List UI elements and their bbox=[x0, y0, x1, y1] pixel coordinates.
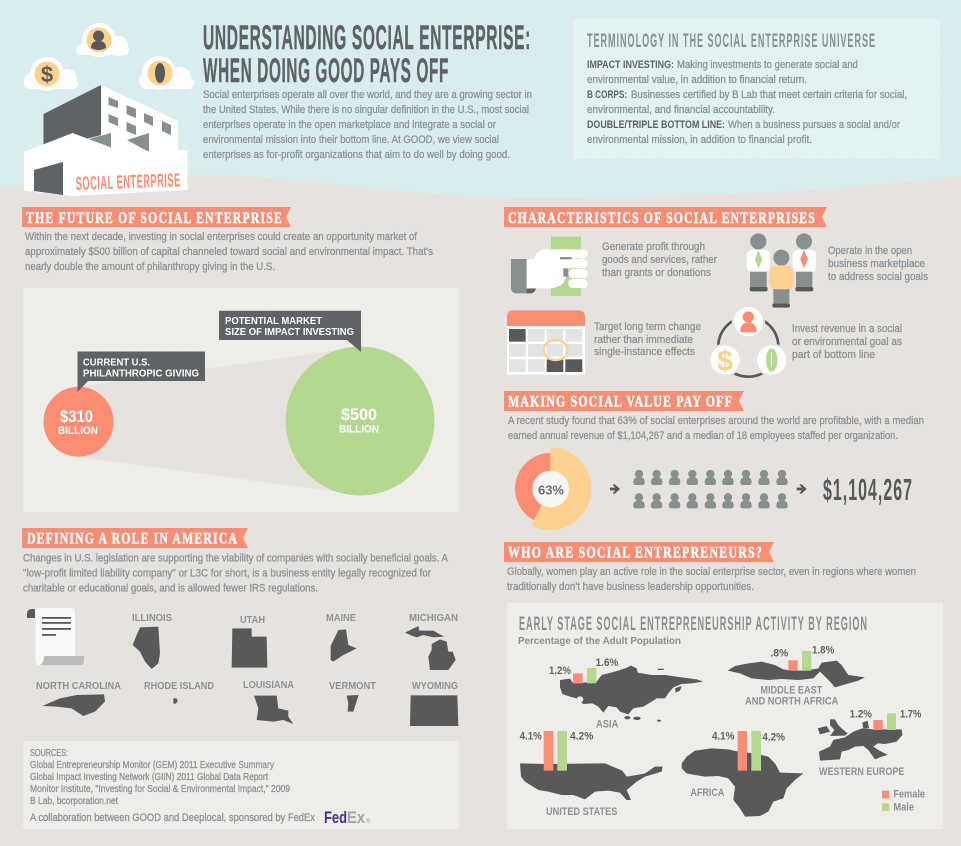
chart: 63% donut bbox=[515, 447, 591, 530]
characteristic: long term change: single-instance effects bbox=[594, 346, 695, 358]
state labels: ILLINOIS bbox=[132, 612, 172, 624]
circle: $500 billion: $500 bbox=[341, 405, 377, 424]
future text: nearly double the amount of philanthropy giving in the U.S. bbox=[25, 261, 275, 273]
region: Western Europe bbox=[818, 709, 922, 778]
region: United States: 4.2% bbox=[570, 730, 594, 742]
heading: making social value pay off bbox=[504, 391, 744, 411]
legend: Female bbox=[893, 788, 925, 800]
sources list: B Lab, bcorporation.net bbox=[30, 796, 118, 807]
icon: legal scroll bbox=[27, 608, 84, 665]
panel: terminology bbox=[573, 19, 940, 159]
characteristic: long term change bbox=[594, 321, 701, 358]
value text: earned annual revenue of $1,104,267 and a median of 18 employees staffed per organization. bbox=[508, 430, 898, 442]
future text: approximately $500 billion of capital channeled toward social and environmental impact. That's bbox=[25, 246, 433, 258]
state shapes bbox=[42, 626, 458, 726]
region: Middle East and North Africa: MIDDLE EAST bbox=[760, 684, 823, 696]
state labels: UTAH bbox=[240, 614, 265, 626]
logo: FedEx bbox=[324, 808, 371, 827]
callout: current philanthropic giving bbox=[78, 352, 205, 392]
panel: bubble comparison bbox=[23, 288, 459, 512]
terminology definitions: IMPACT INVESTING: bbox=[587, 59, 674, 71]
intro text: environmental mission into their bottom line. At GOOD, we view social bbox=[203, 134, 499, 146]
sources list: Global Impact Investing Network (GIIN) 2011 Global Data Report bbox=[30, 772, 268, 783]
region: United States: UNITED STATES bbox=[546, 806, 617, 818]
icon: revenue cycle bbox=[709, 306, 787, 378]
characteristic: open marketplace: business marketplace bbox=[828, 258, 925, 270]
characteristic: generate profit: than grants or donations bbox=[602, 267, 711, 279]
state labels bbox=[36, 612, 458, 692]
heading: the future: THE FUTURE OF SOCIAL ENTERPRISE bbox=[26, 210, 283, 227]
icon: revenue cycle: $ bbox=[717, 346, 733, 378]
region: Middle East and North Africa bbox=[728, 645, 865, 708]
icon group: 18 employees bbox=[633, 470, 788, 508]
terminology definitions bbox=[587, 59, 907, 146]
sources list bbox=[30, 748, 290, 807]
characteristic: invest revenue: part of bottom line bbox=[792, 349, 875, 361]
icon: leaf cloud bbox=[139, 56, 194, 90]
terminology definitions: B CORPS: bbox=[587, 89, 627, 101]
logo: FedEx: Ex bbox=[347, 808, 365, 827]
characteristic: invest revenue: Invest revenue in a social bbox=[792, 323, 902, 335]
region: United States: 4.1% bbox=[520, 730, 542, 742]
terminology definitions: When a business pursues a social and/or bbox=[728, 119, 900, 131]
characteristic: invest revenue bbox=[792, 323, 902, 361]
panel: regional activity chart bbox=[507, 603, 943, 829]
icon: person cloud bbox=[76, 23, 129, 57]
region: Africa bbox=[682, 731, 803, 817]
icon: calendar bbox=[507, 310, 585, 375]
sources list: Global Entrepreneurship Monitor (GEM) 2011 Executive Summary bbox=[30, 760, 274, 771]
heading: defining a role bbox=[22, 528, 248, 548]
heading: characteristics: CHARACTERISTICS OF SOCIAL ENTERPRISES bbox=[508, 210, 816, 227]
terminology definitions: Businesses certified by B Lab that meet certain criteria for social, bbox=[631, 89, 907, 101]
intro text: enterprises as for-profit organizations that aim to do well by doing good. bbox=[203, 149, 510, 161]
state labels: MICHIGAN bbox=[409, 612, 458, 624]
terminology definitions: environmental mission, in addition to financial profit. bbox=[587, 134, 812, 146]
title: WHEN DOING GOOD PAYS OFF bbox=[203, 52, 449, 90]
heading: the future bbox=[22, 207, 291, 227]
terminology definitions: Making investments to generate social and bbox=[677, 59, 858, 71]
legend bbox=[882, 788, 925, 813]
region: Asia bbox=[549, 657, 703, 731]
characteristic: generate profit: goods and services, rather bbox=[602, 254, 717, 266]
intro text: the United States. While there is no singular definition in the U.S., most social bbox=[203, 104, 529, 116]
region: Asia: 1.6% bbox=[596, 657, 619, 669]
region: Africa: 4.1% bbox=[712, 731, 735, 743]
characteristic: long term change: Target long term change bbox=[594, 321, 701, 333]
circle: $310 billion bbox=[44, 387, 114, 457]
characteristic: open marketplace: to address social goals bbox=[828, 271, 928, 283]
circle: $500 billion: BILLION bbox=[339, 424, 379, 436]
heading: defining a role: DEFINING A ROLE IN AMERICA bbox=[27, 530, 238, 548]
future text: Within the next decade, investing in social enterprises could create an opportunity market of bbox=[25, 231, 418, 243]
heading: characteristics bbox=[504, 207, 827, 227]
state labels: MAINE bbox=[326, 612, 356, 624]
sources list: SOURCES: bbox=[30, 748, 68, 759]
callout: current philanthropic giving: CURRENT U.S. bbox=[83, 356, 150, 368]
region: Asia: 1.2% bbox=[549, 665, 571, 677]
arrow bbox=[797, 484, 807, 494]
characteristic: open marketplace: Operate in the open bbox=[828, 245, 912, 257]
header background bbox=[0, 0, 961, 198]
heading: making social value pay off: MAKING SOCIAL VALUE PAY OFF bbox=[508, 394, 733, 410]
state labels: LOUISIANA bbox=[243, 679, 294, 691]
collaboration credit: A collaboration between GOOD and Deeplocal, sponsored by FedEx bbox=[30, 812, 315, 824]
chart: 63% donut: 63% bbox=[538, 482, 564, 497]
defining text: "low-profit limited liability company" or L3C for short, is a business entity legally recognized for bbox=[23, 568, 431, 580]
circle: $500 billion bbox=[286, 346, 434, 496]
region: Africa: 4.2% bbox=[762, 732, 785, 744]
region: Africa: AFRICA bbox=[690, 787, 724, 799]
future text bbox=[25, 231, 433, 273]
characteristic: invest revenue: or environmental goal as bbox=[792, 336, 902, 348]
entrepreneurs text: traditionally don't have business leadership opportunities. bbox=[507, 581, 754, 593]
icon: dollar cloud: $ bbox=[41, 62, 53, 87]
characteristics icons bbox=[507, 233, 816, 378]
callout: potential market size: SIZE OF IMPACT INVESTING bbox=[225, 326, 354, 338]
intro text: enterprises operate in the open marketplace and integrate a social or bbox=[203, 119, 496, 131]
chart subheading: Percentage of the Adult Population bbox=[518, 635, 681, 647]
callout: current philanthropic giving: PHILANTHROPIC GIVING bbox=[83, 368, 199, 380]
state labels: WYOMING bbox=[412, 680, 458, 692]
circle: $310 billion: BILLION bbox=[58, 425, 98, 437]
text: UNDERSTANDING SOCIAL ENTERPRISE: bbox=[203, 19, 531, 57]
state labels: NORTH CAROLINA bbox=[36, 680, 121, 692]
characteristic: generate profit: Generate profit through bbox=[602, 241, 705, 253]
characteristic: long term change: rather than immediate bbox=[594, 334, 693, 346]
region: Western Europe: 1.2% bbox=[850, 709, 872, 721]
characteristic: open marketplace bbox=[828, 245, 928, 283]
state labels: VERMONT bbox=[329, 680, 377, 692]
intro text: Social enterprises operate all over the world, and they are a growing sector in bbox=[203, 89, 532, 101]
state labels: RHODE ISLAND bbox=[144, 680, 214, 692]
terminology definitions: environmental, and financial accountability. bbox=[587, 104, 775, 116]
logo: FedEx: ® bbox=[366, 818, 371, 825]
title bbox=[203, 19, 531, 90]
characteristic: generate profit bbox=[602, 241, 717, 279]
value flow graphic bbox=[515, 447, 807, 530]
defining text: Changes in U.S. legislation are supporting the viability of companies with socially beneficial goals. A bbox=[23, 552, 449, 564]
sources list: Monitor Institute, "Investing for Social & Environmental Impact," 2009 bbox=[30, 784, 290, 795]
intro text bbox=[203, 89, 532, 161]
icon: building bbox=[24, 85, 188, 196]
region: Middle East and North Africa: AND NORTH AFRICA bbox=[745, 696, 838, 708]
region: Western Europe: WESTERN EUROPE bbox=[819, 766, 904, 778]
region: Middle East and North Africa: .8% bbox=[770, 648, 789, 660]
value text bbox=[508, 415, 924, 442]
arrow bbox=[610, 484, 620, 494]
defining text bbox=[23, 552, 449, 594]
icon: business people bbox=[747, 233, 816, 308]
logo: FedEx: Fed bbox=[324, 808, 347, 827]
region: Asia: ASIA bbox=[596, 719, 618, 731]
region: Middle East and North Africa: 1.8% bbox=[812, 645, 835, 657]
region: Western Europe: 1.7% bbox=[900, 709, 922, 721]
icon: dollar cloud bbox=[24, 57, 78, 91]
callout: potential market size: POTENTIAL MARKET bbox=[225, 315, 323, 327]
panel: sources bbox=[23, 741, 459, 829]
chart contents bbox=[520, 645, 925, 818]
heading: who are social entrepreneurs: WHO ARE SOCIAL ENTREPRENEURS? bbox=[508, 544, 763, 562]
region: United States bbox=[520, 730, 663, 818]
terminology definitions: DOUBLE/TRIPLE BOTTOM LINE: bbox=[587, 119, 725, 131]
icon: hand with money bbox=[511, 237, 588, 296]
entrepreneurs text bbox=[507, 566, 916, 593]
terminology definitions: environmental value, in addition to financial return. bbox=[587, 74, 807, 86]
defining text: charitable or educational goals, and is allowed fewer IRS regulations. bbox=[23, 582, 318, 594]
callout: potential market size bbox=[219, 311, 361, 352]
legend: Male bbox=[893, 801, 914, 813]
illustration: social enterprise building with clouds bbox=[24, 23, 194, 196]
circle: $310 billion: $310 bbox=[60, 407, 93, 426]
icon: building: SOCIAL ENTERPRISE bbox=[75, 170, 181, 195]
heading: who are social entrepreneurs bbox=[504, 542, 774, 562]
states grid bbox=[36, 612, 458, 726]
